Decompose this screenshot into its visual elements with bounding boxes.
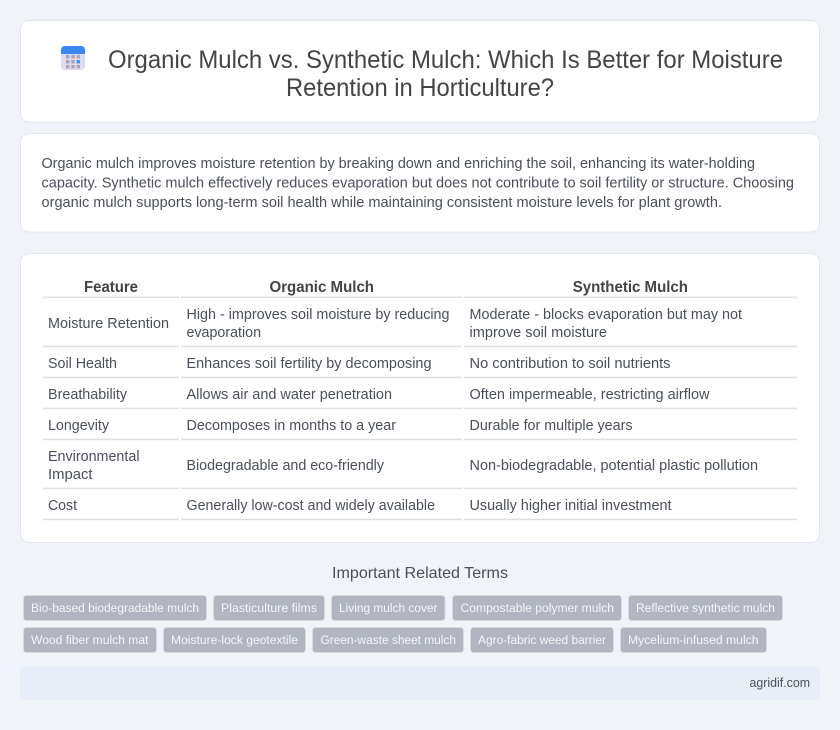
heading: important related terms: Important Related Terms	[332, 565, 508, 582]
row: environmental impact	[43, 449, 797, 489]
title: Organic Mulch vs. Synthetic Mulch: Which Is Better for Moisture	[108, 46, 783, 74]
table header row: Synthetic Mulch	[573, 279, 688, 296]
table header row: Organic Mulch	[270, 279, 374, 296]
tag	[620, 628, 766, 652]
row: environmental impact: Environmental	[48, 449, 140, 465]
tag: Plasticulture films	[221, 601, 317, 615]
row: moisture retention: High - improves soil moisture by reducing	[186, 307, 450, 323]
tag: Compostable polymer mulch	[460, 601, 614, 615]
table header row	[43, 279, 797, 298]
panel: introduction text: organic mulch supports long-term soil health while maintaining consistent moisture levels for plant growth.	[42, 195, 722, 211]
row: cost: Cost	[48, 498, 77, 514]
tag	[164, 628, 306, 652]
row: longevity	[43, 418, 797, 440]
row: moisture retention: improve soil moisture	[470, 325, 607, 341]
tag	[332, 596, 445, 620]
row: longevity: Durable for multiple years	[470, 418, 632, 434]
table header row: Feature	[84, 279, 138, 296]
tag: Bio-based biodegradable mulch	[31, 601, 199, 615]
tag: Moisture-lock geotextile	[171, 633, 298, 647]
tag: Reflective synthetic mulch	[636, 601, 775, 615]
tag	[470, 628, 614, 652]
row: moisture retention: evaporation	[186, 325, 261, 341]
related term tags	[24, 596, 782, 652]
panel: introduction text: capacity. Synthetic mulch effectively reduces evaporation but does not contribute to soil fertility or structure. Choosing	[42, 176, 794, 192]
row: soil health	[43, 356, 797, 378]
footer bar	[20, 666, 820, 700]
row: moisture retention: Moderate - blocks evaporation but may not	[470, 307, 742, 323]
row: soil health: Enhances soil fertility by decomposing	[186, 356, 432, 372]
row: cost: Generally low-cost and widely available	[186, 498, 435, 514]
tag: Wood fiber mulch mat	[31, 633, 149, 647]
row: breathability: Often impermeable, restricting airflow	[470, 387, 710, 403]
row: longevity: Longevity	[48, 418, 110, 434]
tag	[628, 596, 782, 620]
row: environmental impact: Non-biodegradable, potential plastic pollution	[470, 458, 758, 474]
tag	[24, 596, 206, 620]
tag	[312, 628, 464, 652]
tag: Living mulch cover	[339, 601, 438, 615]
tag: Mycelium-infused mulch	[628, 633, 759, 647]
row: breathability: Allows air and water penetration	[186, 387, 392, 403]
row: moisture retention	[43, 307, 797, 347]
row: moisture retention: Moisture Retention	[48, 316, 169, 332]
row: breathability	[43, 387, 797, 409]
panel: introduction text: Organic mulch improves moisture retention by breaking down and enriching the soil, enhancing its water-holding	[42, 156, 755, 172]
panel: comparison table	[20, 254, 820, 542]
row: cost	[43, 498, 797, 520]
tag: Green-waste sheet mulch	[320, 633, 456, 647]
title: Retention in Horticulture?	[286, 74, 554, 102]
row: longevity: Decomposes in months to a year	[186, 418, 396, 434]
row: environmental impact: Biodegradable and eco-friendly	[186, 458, 385, 474]
footer bar: agridif.com	[750, 675, 810, 690]
row: cost: Usually higher initial investment	[470, 498, 672, 514]
tag	[214, 596, 324, 620]
tag	[452, 596, 622, 620]
row: soil health: No contribution to soil nutrients	[470, 356, 670, 372]
panel: introduction text	[20, 134, 820, 232]
icon: calendar grid	[61, 46, 85, 70]
panel: title header	[20, 20, 820, 122]
row: soil health: Soil Health	[48, 356, 117, 372]
row: breathability: Breathability	[48, 387, 128, 403]
row: environmental impact: Impact	[48, 467, 92, 483]
title	[108, 46, 783, 102]
tag: Agro-fabric weed barrier	[478, 633, 606, 647]
tag	[24, 628, 156, 652]
